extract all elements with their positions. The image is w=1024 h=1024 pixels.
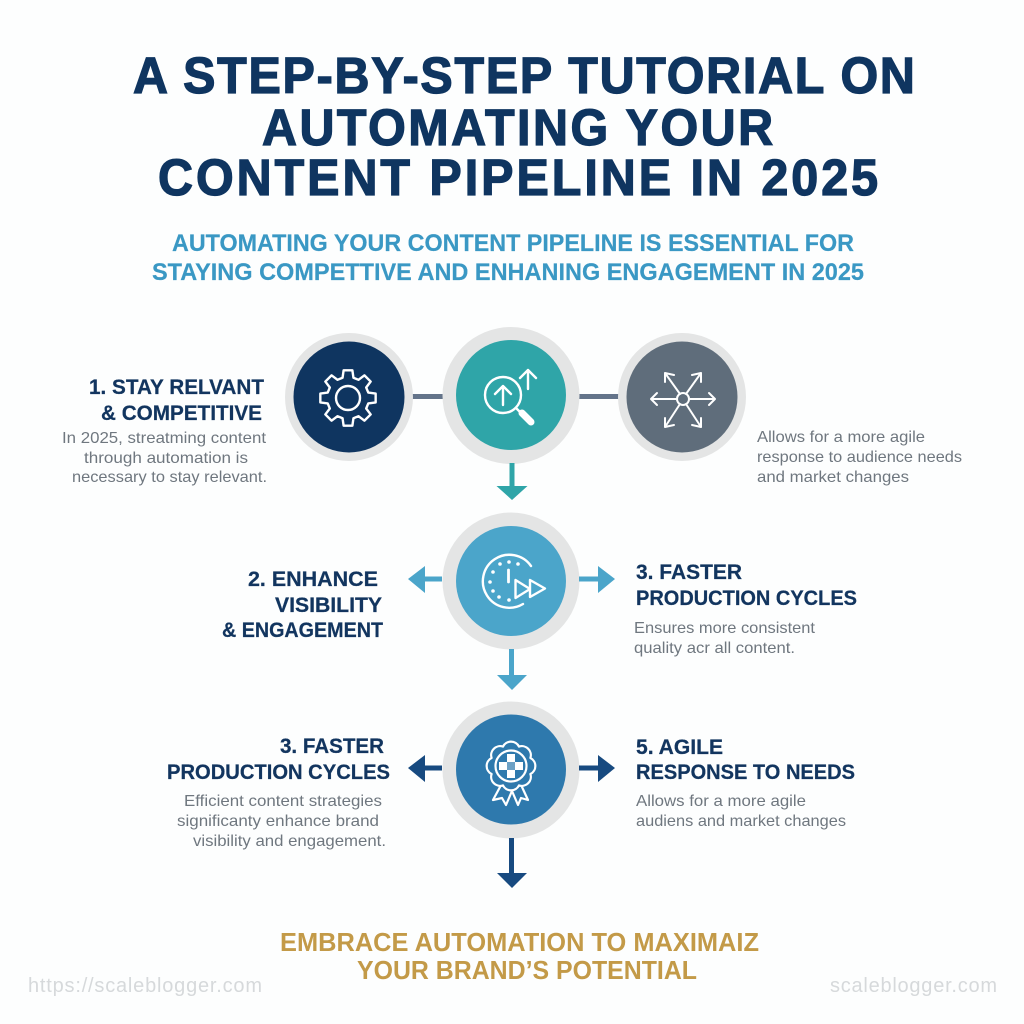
text block: step 1: In 2025, streatming content: [62, 430, 267, 447]
title: AUTOMATING YOUR: [262, 99, 773, 156]
subtitle: STAYING COMPETTIVE AND ENHANING ENGAGEMENT IN 2025: [152, 259, 864, 286]
title: [133, 47, 915, 206]
text block: step 1: 1. STAY RELVANT: [89, 376, 264, 399]
text block: step 3 right: Ensures more consistent: [634, 620, 816, 637]
closing call to action: EMBRACE AUTOMATION TO MAXIMAIZ: [280, 927, 759, 957]
text block: top right note: Allows for a more agile: [757, 429, 925, 446]
connector: search to network: [579, 394, 619, 399]
subtitle: [152, 230, 864, 286]
text block: step 3 right: 3. FASTER: [636, 561, 742, 584]
text block: step 1: [62, 376, 267, 486]
icon: award rosette: [487, 742, 535, 805]
text block: step 3 left: [167, 735, 390, 850]
closing call to action: [280, 927, 759, 985]
text block: step 1: & COMPETITIVE: [101, 402, 262, 425]
text block: step 2: [222, 568, 383, 642]
text block: top right note: response to audience needs: [757, 449, 962, 466]
text block: step 3 left: significanty enhance brand: [177, 813, 379, 830]
text block: step 3 left: PRODUCTION CYCLES: [167, 761, 390, 784]
icon: magnifier with arrows: [485, 370, 536, 422]
text block: step 3 right: PRODUCTION CYCLES: [636, 587, 857, 610]
title: CONTENT PIPELINE IN 2025: [158, 149, 878, 206]
title: A STEP-BY-STEP TUTORIAL ON: [133, 47, 915, 104]
text block: step 5: RESPONSE TO NEEDS: [636, 761, 855, 784]
text block: step 5: 5. AGILE: [636, 736, 723, 759]
node: gear: [285, 333, 413, 461]
node: network: [618, 333, 746, 461]
text block: step 2: & ENGAGEMENT: [222, 619, 383, 642]
text block: step 5: audiens and market changes: [636, 813, 846, 830]
text block: step 5: Allows for a more agile: [636, 793, 806, 810]
arrow: light blue down: [497, 649, 527, 690]
text block: top right note: and market changes: [757, 469, 909, 486]
arrow: light blue right: [579, 566, 615, 593]
text block: step 3 right: [634, 561, 857, 657]
icon: radiating arrows: [651, 373, 715, 427]
node: clock: [442, 512, 580, 650]
text block: step 3 left: visibility and engagement.: [193, 833, 386, 850]
text block: step 1: through automation is: [84, 450, 248, 467]
watermark right: scaleblogger.com: [830, 975, 997, 997]
node: search: [442, 327, 580, 464]
node: award: [442, 702, 580, 838]
arrow: navy left: [408, 755, 442, 782]
arrow: navy down: [497, 838, 527, 888]
icon: clock with fast-forward: [483, 555, 545, 608]
text block: top right note: [757, 429, 962, 486]
text block: step 5: [636, 736, 855, 830]
arrow: teal down: [496, 463, 528, 500]
text block: step 3 left: Efficient content strategies: [184, 793, 382, 810]
text block: step 3 right: quality acr all content.: [634, 640, 795, 657]
closing call to action: YOUR BRAND’S POTENTIAL: [357, 955, 697, 985]
text block: step 2: VISIBILITY: [275, 594, 382, 617]
icon: gear: [320, 370, 376, 426]
watermark left: https://scaleblogger.com: [28, 975, 262, 997]
text block: step 3 left: 3. FASTER: [280, 735, 384, 758]
text block: step 1: necessary to stay relevant.: [72, 469, 267, 486]
subtitle: AUTOMATING YOUR CONTENT PIPELINE IS ESSENTIAL FOR: [172, 230, 854, 257]
connector: gear to search: [412, 394, 443, 399]
text block: step 2: 2. ENHANCE: [248, 568, 378, 591]
arrow: light blue left: [408, 566, 442, 593]
arrow: navy right: [579, 755, 615, 782]
